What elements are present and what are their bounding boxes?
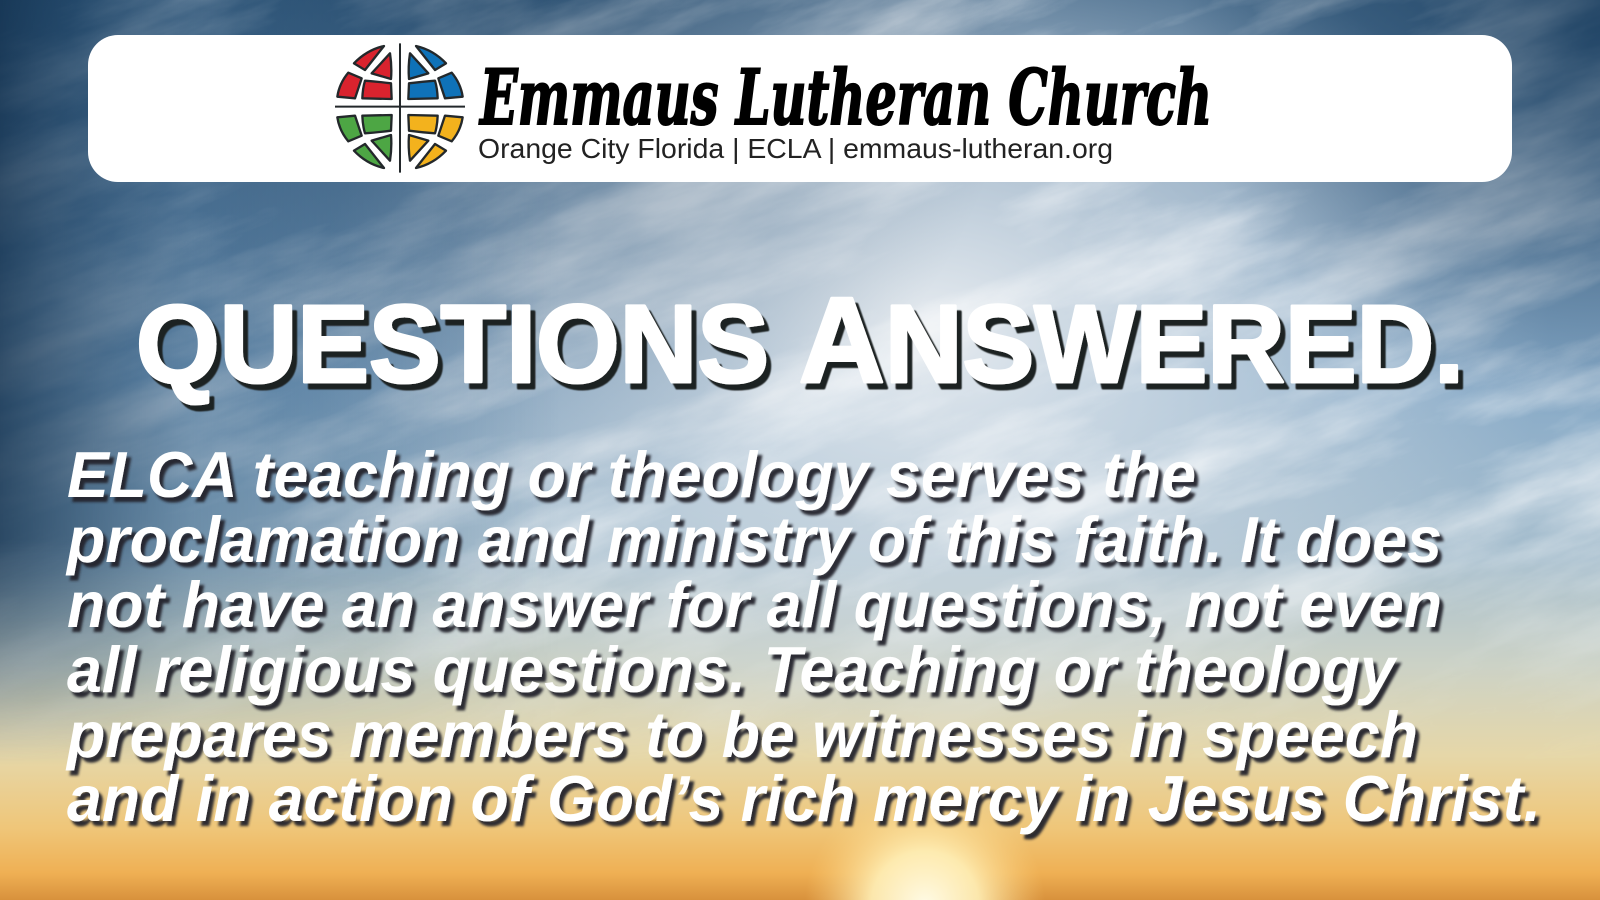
body text: and in action of God’s rich mercy in Jesus Christ. [67,762,1541,835]
body text: ELCA teaching or theology serves the [67,438,1196,511]
header panel [88,35,1512,182]
body text: prepares members to be witnesses in speech [65,698,1418,771]
body text: proclamation and ministry of this faith. It does [65,503,1442,576]
body text [65,438,1541,835]
church name: Emmaus Lutheran Church [479,53,1212,142]
body text: not have an answer for all questions, not even [67,568,1442,641]
church subtitle: Orange City Florida | ECLA | emmaus-lutheran.org [478,133,1113,164]
heading: QUESTIONS ANSWERED. [136,272,1464,408]
icon: ELCA cross and globe logo [335,43,465,173]
body text: all religious questions. Teaching or theology [67,633,1398,706]
